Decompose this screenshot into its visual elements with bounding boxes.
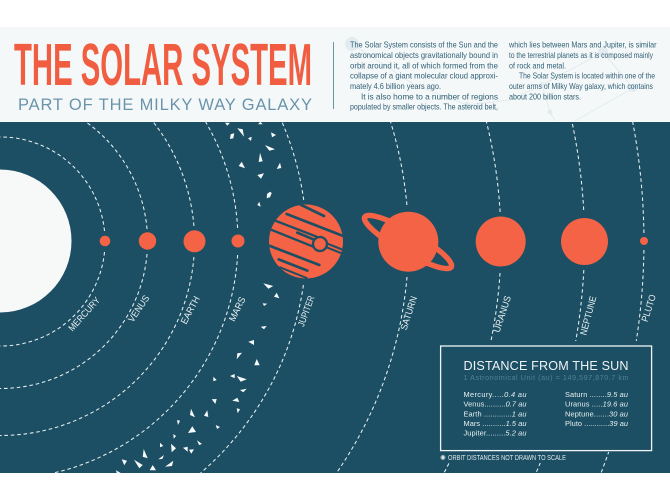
distance list right: Neptune.......30 au	[565, 409, 628, 418]
white strip: top	[0, 0, 670, 27]
planet: Uranus	[476, 216, 526, 266]
intro text column 1: collapse of a giant molecular cloud approxi-	[350, 71, 498, 81]
orbit mask around distance panel	[436, 341, 656, 463]
distance list left	[464, 390, 526, 438]
distance list left: Mars ...........1.5 au	[464, 419, 526, 428]
astronomical unit note: 1 Astronomical Unit (au) = 149,597,870.7 km	[464, 373, 628, 382]
planet labels: EARTH	[179, 294, 203, 326]
distance list left: Venus..........0.7 au	[464, 400, 526, 409]
distance list right: Uranus .....19.6 au	[565, 400, 628, 409]
planet labels: MARS	[227, 295, 248, 323]
intro text column 1: mately 4.6 billion years ago.	[350, 81, 441, 91]
space background panel	[0, 122, 670, 473]
planet: Saturn	[359, 208, 457, 276]
footnote: ✺	[440, 454, 446, 462]
distance list right: Saturn ........9.5 au	[565, 390, 628, 399]
planet: Mars	[232, 234, 244, 248]
planet: Pluto	[640, 237, 648, 245]
planet labels: URANUS	[492, 295, 514, 334]
distance heading: DISTANCE FROM THE SUN	[464, 359, 628, 373]
intro text column 2: of rock and metal.	[509, 60, 566, 70]
planet labels	[67, 293, 659, 336]
planet: Earth	[184, 230, 206, 252]
planet labels: JUPITER	[296, 294, 318, 328]
planet: Jupiter	[265, 204, 345, 278]
header panel	[0, 27, 670, 122]
intro text column 1: The Solar System consists of the Sun and the	[350, 40, 498, 50]
faint constellation behind text	[345, 37, 637, 121]
intro text column 2: about 200 billion stars.	[509, 91, 581, 101]
planet labels: SATURN	[399, 295, 420, 332]
intro text column 1: populated by smaller objects. The asteroid belt,	[350, 102, 498, 112]
planet labels: PLUTO	[640, 293, 659, 323]
intro text column 2	[508, 40, 657, 101]
intro text column 1: It is also home to a number of regions	[361, 91, 498, 101]
intro text column 1: astronomical objects gravitationally bound in	[350, 50, 498, 60]
distance list right: Pluto ............39 au	[565, 419, 628, 428]
distance list left: Earth .............1 au	[464, 409, 526, 418]
distance list left: Jupiter.........5.2 au	[464, 429, 526, 438]
distance list right	[565, 390, 628, 428]
panel: distance from the sun	[441, 346, 652, 451]
text: THE SOLAR SYSTEM	[14, 32, 312, 98]
planet: Neptune	[561, 218, 608, 265]
intro text column 1: orbit around it, all of which formed from the	[350, 60, 498, 70]
footnote: ORBIT DISTANCES NOT DRAWN TO SCALE	[448, 455, 566, 462]
sun	[0, 170, 72, 312]
footnote	[440, 454, 566, 462]
header divider	[333, 42, 334, 109]
subtitle: PART OF THE MILKY WAY GALAXY	[18, 96, 312, 114]
orbit paths	[0, 122, 644, 473]
planet: Venus	[139, 232, 156, 250]
planet labels: MERCURY	[67, 295, 103, 334]
planet labels: NEPTUNE	[578, 295, 599, 336]
asteroid belt	[116, 122, 281, 473]
planet: Mercury	[100, 236, 110, 246]
intro text column 1	[350, 40, 498, 112]
planet labels: VENUS	[126, 293, 152, 325]
distance list left: Mercury.....0.4 au	[464, 390, 526, 399]
